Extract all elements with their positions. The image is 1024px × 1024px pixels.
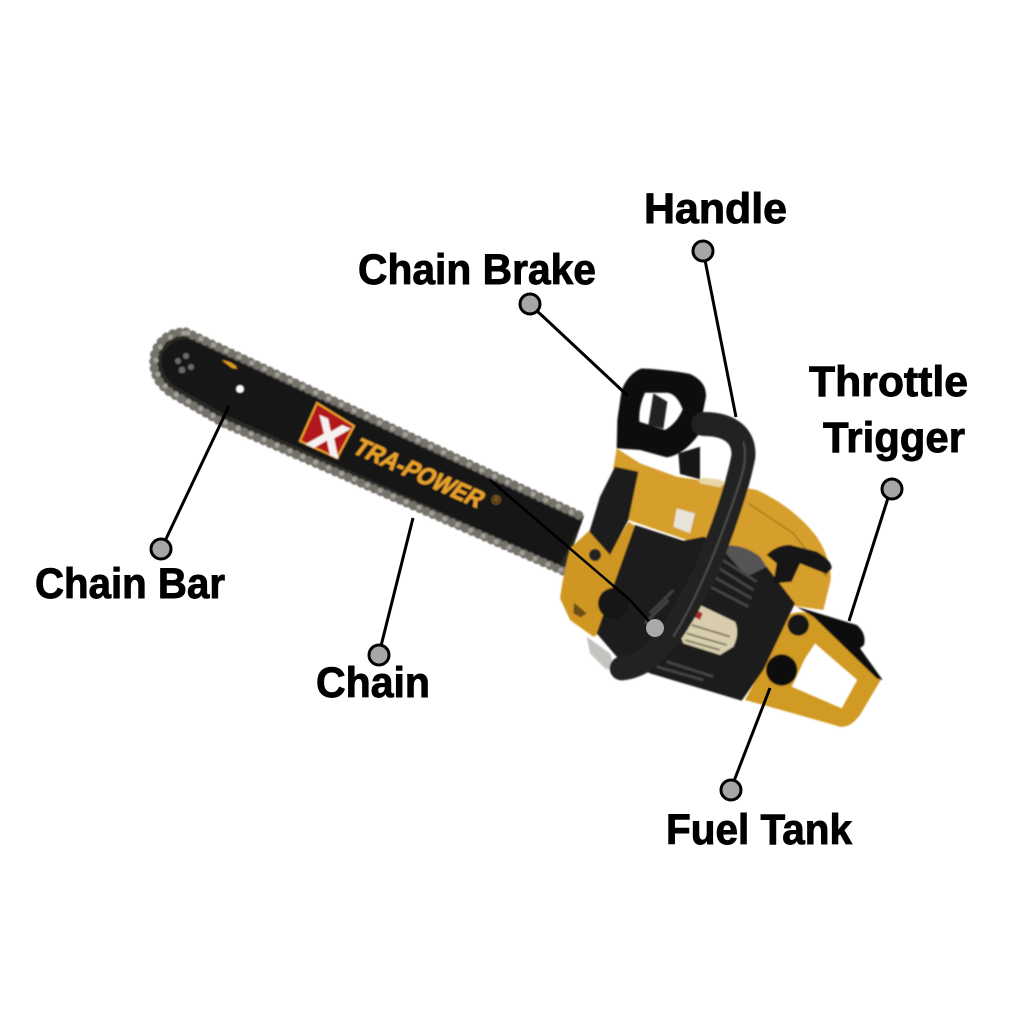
clutch guard (589, 467, 638, 555)
fuel cap (766, 654, 797, 686)
sprocket cover (560, 522, 637, 637)
brake grip rib (648, 393, 667, 429)
label: Trigger: Trigger (823, 414, 965, 462)
housing seam (748, 503, 827, 577)
yellow housing (603, 448, 831, 610)
marker: chain (369, 645, 389, 665)
label: Chain: Chain (316, 659, 430, 707)
chainsaw photo illustration (153, 331, 883, 727)
label: Fuel Tank: Fuel Tank (666, 806, 852, 854)
chain brake (617, 368, 706, 457)
grey engine cover (720, 545, 767, 577)
marker: chain bar (151, 539, 171, 559)
cover vent (573, 603, 587, 617)
marker: handle (693, 241, 713, 261)
handle highlight (673, 442, 745, 637)
label: Chain Bar: Chain Bar (35, 560, 225, 608)
chain (153, 331, 584, 573)
label: Handle: Handle (644, 185, 787, 233)
label: Throttle: Throttle (809, 358, 968, 406)
rear handle frame (745, 612, 882, 727)
throttle trigger (797, 607, 883, 680)
silver underside (587, 637, 617, 672)
label plate (681, 605, 737, 655)
X logo: X (302, 406, 355, 468)
cream panel behind handle (698, 478, 727, 487)
leader lines (165, 260, 888, 781)
engine body (597, 525, 795, 701)
marker: engine (646, 619, 664, 637)
marker: throttle trigger (882, 479, 902, 499)
starter grip (767, 545, 832, 583)
sprocket holes (175, 353, 194, 373)
marker: chain brake (520, 294, 540, 314)
chain bar (162, 339, 582, 565)
marker: fuel tank (721, 780, 741, 800)
cooling vents (645, 558, 757, 680)
brand text: TRA-POWER (347, 434, 491, 513)
chain bar: ® (489, 491, 504, 509)
rear handle support (678, 447, 700, 479)
front knob (598, 588, 629, 619)
front handle (622, 424, 743, 668)
white sticker (673, 508, 695, 533)
label: Chain Brake: Chain Brake (358, 246, 596, 294)
bar hole (236, 385, 244, 393)
small bar mark (222, 360, 237, 369)
bolt knob (589, 549, 601, 561)
oil cap (788, 614, 809, 636)
